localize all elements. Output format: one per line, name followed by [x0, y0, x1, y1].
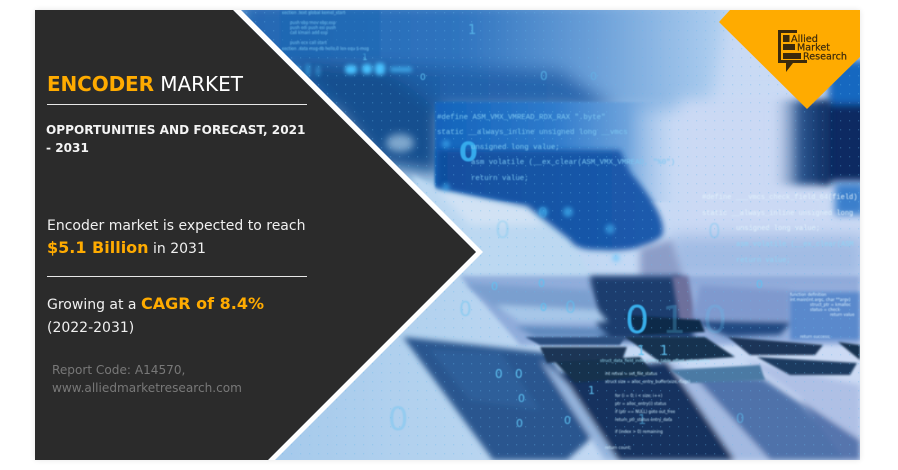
- photo: hand on keyboard with data overlay: [233, 10, 860, 460]
- digits overlay: 1: [638, 413, 646, 428]
- small code blocks: section .data msg db hello,0 len equ $-msg: [282, 46, 369, 51]
- digits overlay: 0: [756, 278, 763, 291]
- digits overlay: 0: [516, 417, 523, 430]
- code lines: static __always_inline unsigned long: [702, 210, 853, 218]
- code lines: unsigned long value;: [471, 144, 560, 152]
- digits overlay: 0: [515, 367, 523, 381]
- title: ENCODER MARKET: [47, 72, 244, 96]
- digits overlay: 1: [637, 344, 645, 359]
- digits overlay: 0: [495, 216, 510, 244]
- digits overlay: 0: [538, 204, 548, 222]
- logo badge: [719, 10, 860, 109]
- digits overlay: 0: [564, 414, 571, 427]
- digits overlay: 0: [565, 298, 576, 318]
- keyboard base: [460, 276, 860, 345]
- digits overlay: 0: [388, 400, 408, 438]
- code lines: static __always_inline unsigned long __vmcs: [437, 129, 628, 137]
- digits overlay: 0: [459, 297, 472, 321]
- digits overlay: 0: [708, 219, 721, 243]
- code lines: unsigned long value;: [736, 225, 820, 233]
- logo text: Market: [797, 42, 830, 54]
- small code blocks: int main(int argc, char **argv): [790, 297, 851, 302]
- digits overlay: 1: [468, 23, 476, 38]
- upper hand area: [240, 0, 730, 175]
- digits overlay: 0: [736, 412, 744, 427]
- digits overlay: [362, 23, 763, 438]
- code lines: return value;: [471, 175, 529, 183]
- glowing blobs: [295, 63, 620, 262]
- code lines: asm volatile (__ex_clear(ASM_VMX_VMREAD, "%0"): [471, 159, 675, 167]
- market size statement: Encoder market is expected to reach: [47, 218, 305, 234]
- pale hand shape: [412, 175, 507, 204]
- digits overlay: 0: [540, 69, 548, 83]
- code lines: asm volatile (__ex_clear(ASM: [736, 241, 854, 249]
- small code blocks: struct size = alloc_entry_buffer(size, flags): [605, 379, 691, 384]
- subtitle: - 2031: [46, 141, 89, 155]
- small code blocks: return_ptr_status entry_data: [615, 417, 673, 422]
- report code: Report Code: A14570,: [52, 363, 185, 377]
- small code blocks: push ebp mov ebp,esp: [290, 20, 336, 25]
- subtitle: OPPORTUNITIES AND FORECAST, 2021: [46, 123, 305, 137]
- digits overlay: 0: [491, 280, 498, 293]
- small code blocks: push ecx call start: [290, 40, 327, 45]
- digits overlay: 0: [703, 298, 727, 342]
- market size statement: in 2031: [149, 241, 206, 257]
- digits overlay: 0: [625, 298, 649, 342]
- logo text: Allied: [791, 34, 818, 45]
- small code blocks: [280, 10, 855, 450]
- small code blocks: if (ptr == NULL) goto out_free: [615, 409, 676, 414]
- title divider: [47, 104, 307, 105]
- small code blocks: section .text global kernel_start: [282, 10, 346, 15]
- small code blocks: for (i = 0; i < size; i++): [615, 393, 663, 398]
- finger: [437, 150, 663, 250]
- digits overlay: 0: [495, 367, 503, 381]
- code lines: #define ___vmcs_check_field_64(field): [702, 194, 857, 202]
- digits overlay: 0: [540, 301, 547, 314]
- digits overlay: 0: [538, 277, 545, 290]
- light blob on knuckle: [386, 134, 414, 152]
- CAGR statement: Growing at a: [47, 297, 141, 313]
- report code: www.alliedmarketresearch.com: [52, 381, 242, 395]
- code lines: return value;: [736, 257, 791, 265]
- small code blocks: return success;: [800, 334, 830, 339]
- small code blocks: push edi push esi push: [290, 25, 336, 30]
- code box right: [790, 292, 860, 340]
- small code blocks: status = check: [810, 307, 841, 312]
- white chevron border: [233, 10, 483, 460]
- right background haze: [670, 100, 865, 280]
- keyboard lower bands: [403, 337, 860, 460]
- digits overlay: 1: [362, 53, 368, 63]
- finger base: [636, 238, 684, 278]
- small code blocks: if (index > 0) remaining: [615, 429, 663, 434]
- panel: dark chevron: [35, 10, 476, 460]
- small code blocks: int retval = set_file_status: [605, 371, 657, 376]
- market size statement: $5.1 Billion: [47, 238, 149, 257]
- logo text: [791, 34, 847, 62]
- digits overlay: 1: [660, 344, 668, 359]
- CAGR statement: (2022-2031): [47, 320, 134, 336]
- small code blocks: struct_data_field_index_entry_table_offset_value_entry: [600, 358, 710, 363]
- digits overlay: 0: [420, 73, 426, 83]
- logo text: Research: [803, 52, 847, 62]
- small code blocks: function definition: [790, 292, 827, 297]
- statement divider: [47, 276, 307, 277]
- code lines: #define ASM_VMX_VMREAD_RDX_RAX ".byte": [437, 114, 606, 122]
- small code blocks: call kmain add esp: [290, 30, 328, 35]
- small code blocks: return value: [830, 312, 855, 317]
- key row one: [465, 283, 792, 337]
- digits overlay: 0: [590, 70, 597, 83]
- digits overlay: 1: [588, 384, 595, 397]
- code lines: [437, 114, 857, 265]
- digits overlay: 0: [459, 137, 478, 168]
- small code blocks: return count;: [605, 445, 631, 450]
- small code blocks: struct_ptr = kmalloc: [810, 302, 851, 307]
- small code blocks: ptr = alloc_entry(i) status: [615, 401, 666, 406]
- dark right display: [820, 57, 860, 188]
- code screen: [435, 102, 675, 202]
- digits overlay: 1: [662, 298, 686, 342]
- CAGR statement: CAGR of 8.4%: [141, 294, 264, 313]
- icon: logo mark: [778, 30, 807, 72]
- keyboard keys: [525, 315, 860, 383]
- digits overlay: 0: [518, 392, 525, 405]
- dotted data texture: [240, 10, 860, 460]
